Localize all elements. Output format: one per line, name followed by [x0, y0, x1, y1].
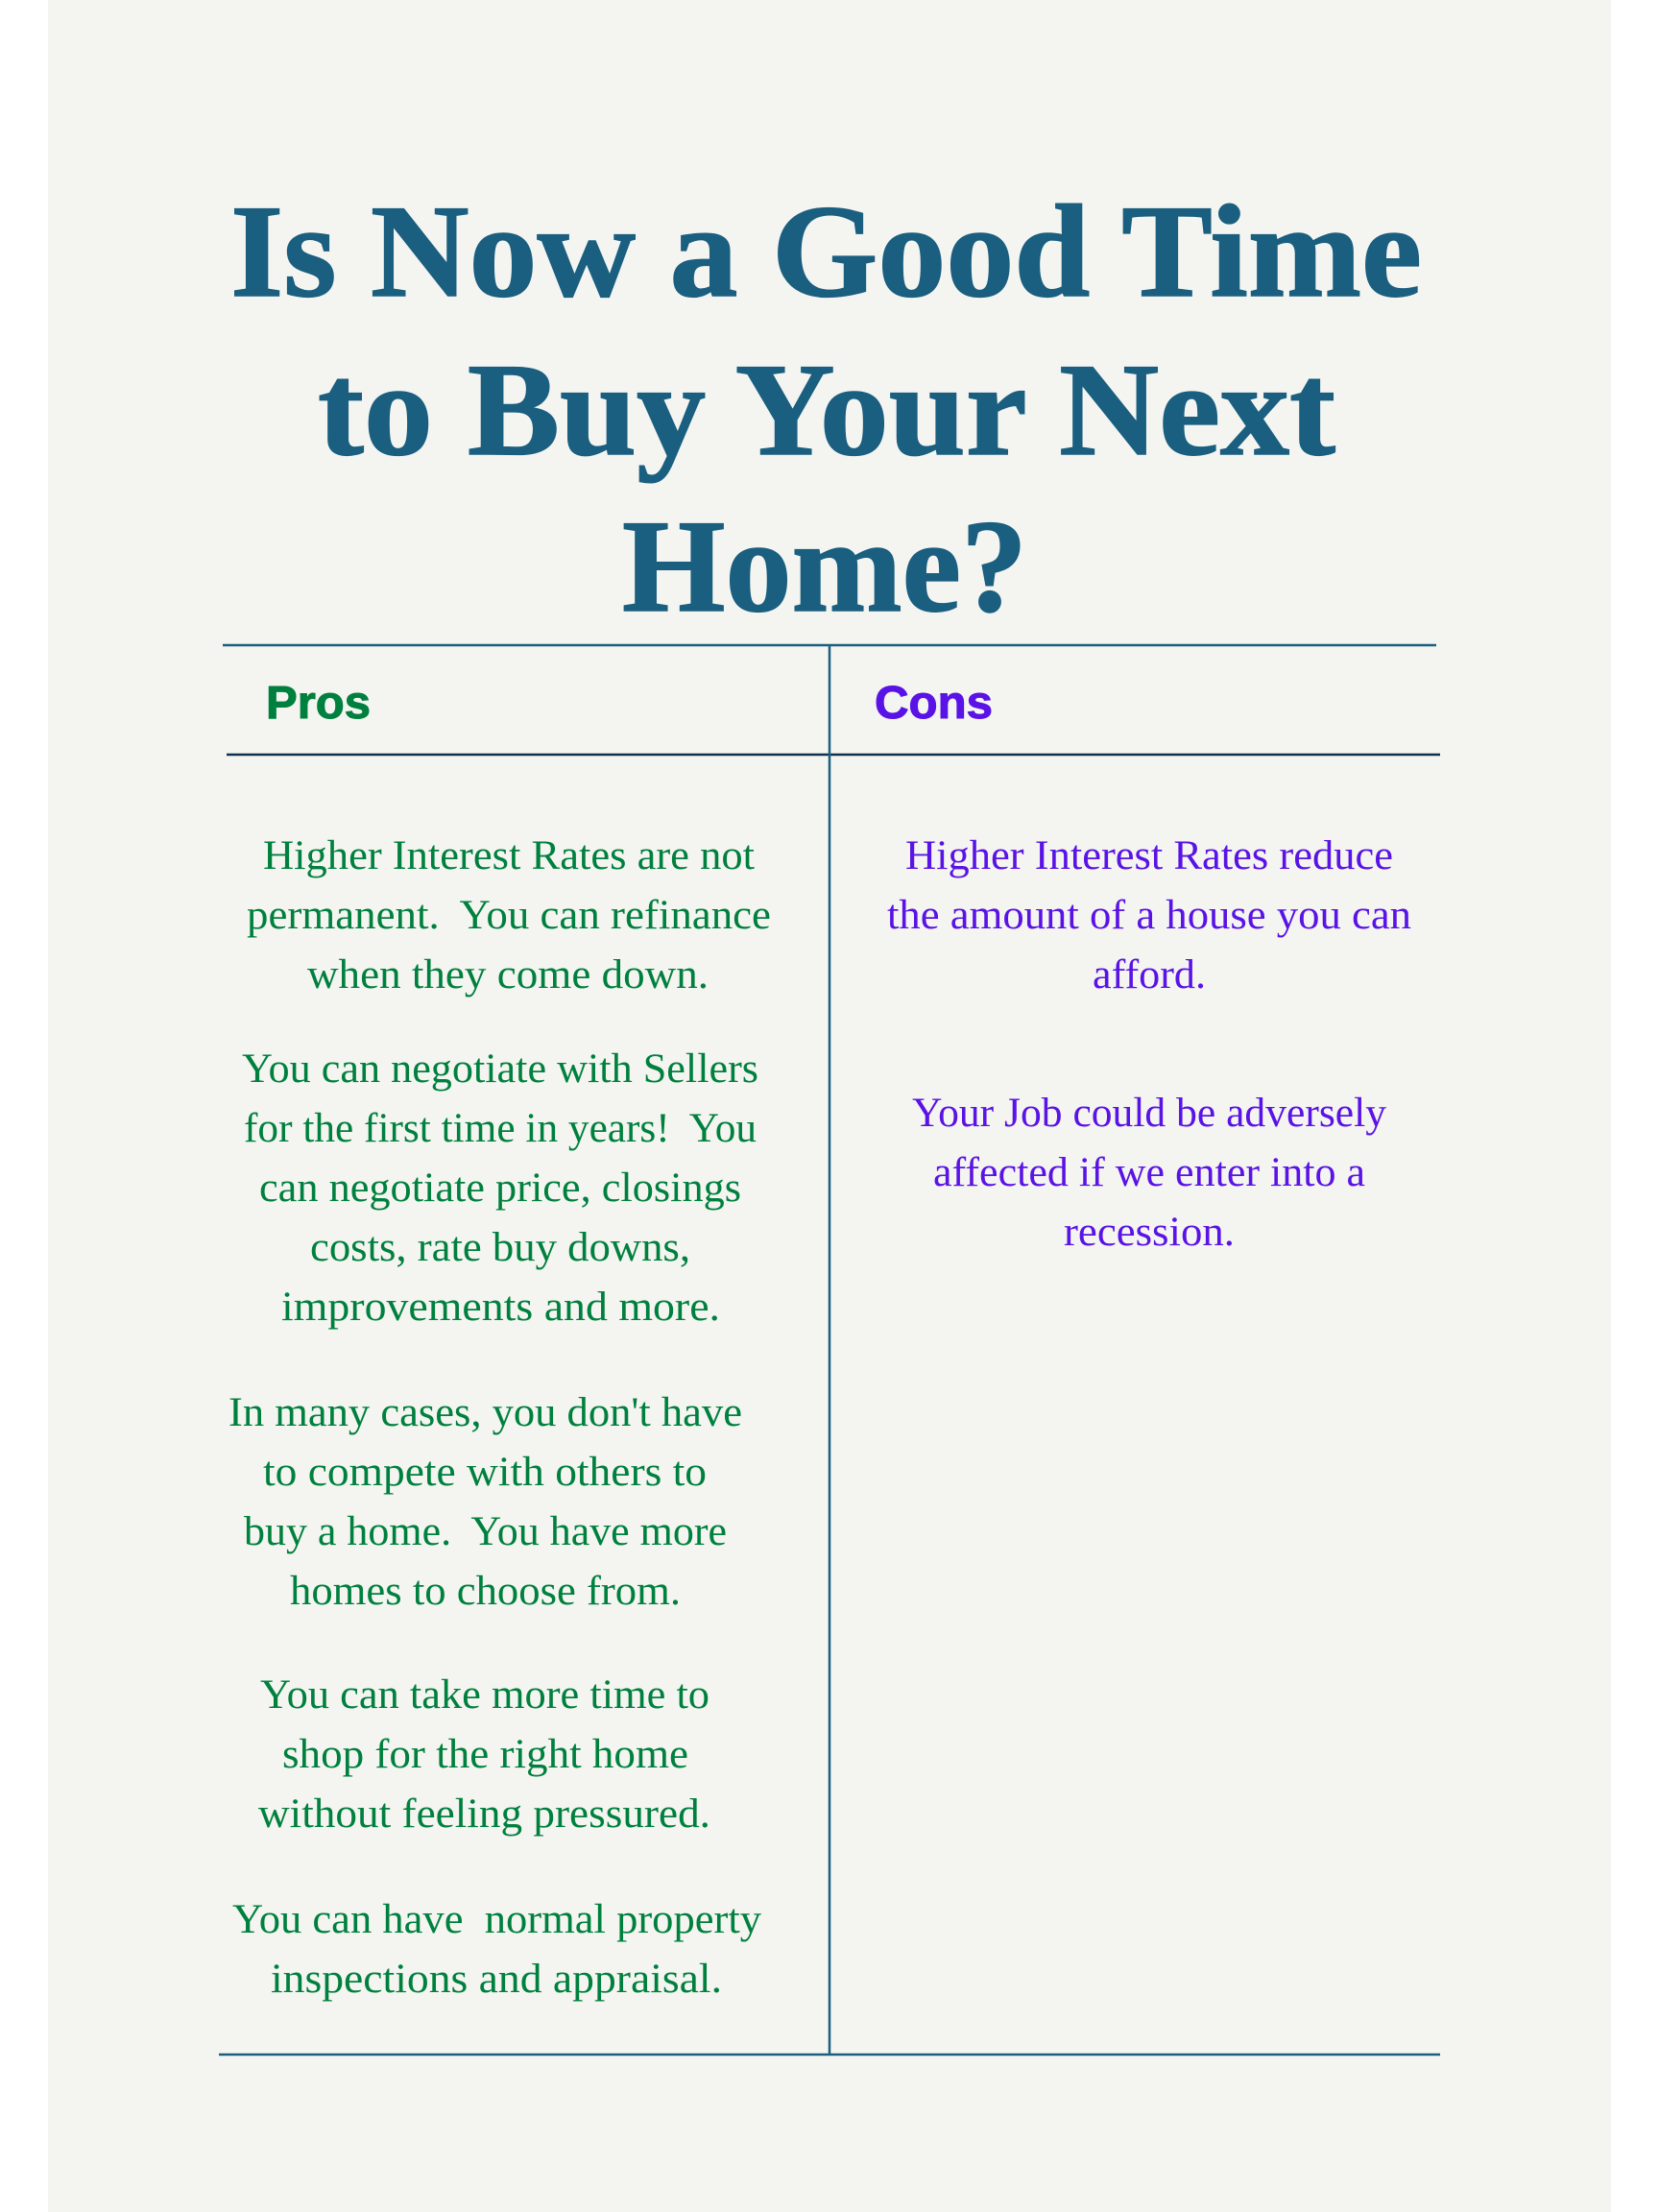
pro: less competition: to compete with others to: [263, 1450, 707, 1495]
pro: less competition: In many cases, you don't have: [228, 1390, 742, 1435]
panel: cons list: [887, 833, 1411, 1255]
con: job risk: recession.: [1064, 1210, 1235, 1255]
pro: interest rates: permanent. You can refinance: [247, 893, 771, 938]
pro: negotiate: costs, rate buy downs,: [310, 1225, 690, 1270]
pro: inspections: You can have normal property: [232, 1897, 762, 1942]
pro: more time: without feeling pressured.: [258, 1791, 710, 1837]
pro: inspections: inspections and appraisal.: [271, 1957, 722, 2002]
pro: negotiate: can negotiate price, closings: [259, 1166, 741, 1211]
heading: pros: Pros: [266, 678, 371, 729]
con: job risk: Your Job could be adversely: [912, 1091, 1386, 1136]
pro: less competition: [228, 1390, 742, 1614]
pro: negotiate: for the first time in years! You: [244, 1106, 757, 1151]
pro: less competition: homes to choose from.: [290, 1569, 681, 1614]
title: [230, 178, 1422, 639]
pro: less competition: buy a home. You have more: [244, 1509, 727, 1554]
con: interest rates: afford.: [1093, 952, 1206, 998]
pro: inspections: [232, 1897, 762, 2002]
con: interest rates: Higher Interest Rates reduce: [905, 833, 1393, 878]
pro: negotiate: [242, 1046, 758, 1330]
con: interest rates: the amount of a house you can: [887, 893, 1411, 938]
title: to Buy Your Next: [318, 336, 1335, 483]
pro: negotiate: You can negotiate with Sellers: [242, 1046, 758, 1092]
title: Is Now a Good Time: [230, 178, 1422, 325]
pro: interest rates: [247, 833, 771, 998]
panel: pros list: [228, 833, 771, 2002]
pro: more time: shop for the right home: [282, 1732, 688, 1777]
pro: more time: You can take more time to: [260, 1672, 709, 1718]
pro: negotiate: improvements and more.: [281, 1285, 720, 1330]
con: job risk: affected if we enter into a: [933, 1150, 1365, 1195]
pro: interest rates: when they come down.: [307, 952, 709, 998]
con: job risk: [912, 1091, 1386, 1255]
pro: more time: [258, 1672, 710, 1837]
heading: cons: Cons: [875, 678, 993, 729]
con: interest rates: [887, 833, 1411, 998]
pro: interest rates: Higher Interest Rates are not: [263, 833, 755, 878]
title: Home?: [622, 493, 1027, 639]
